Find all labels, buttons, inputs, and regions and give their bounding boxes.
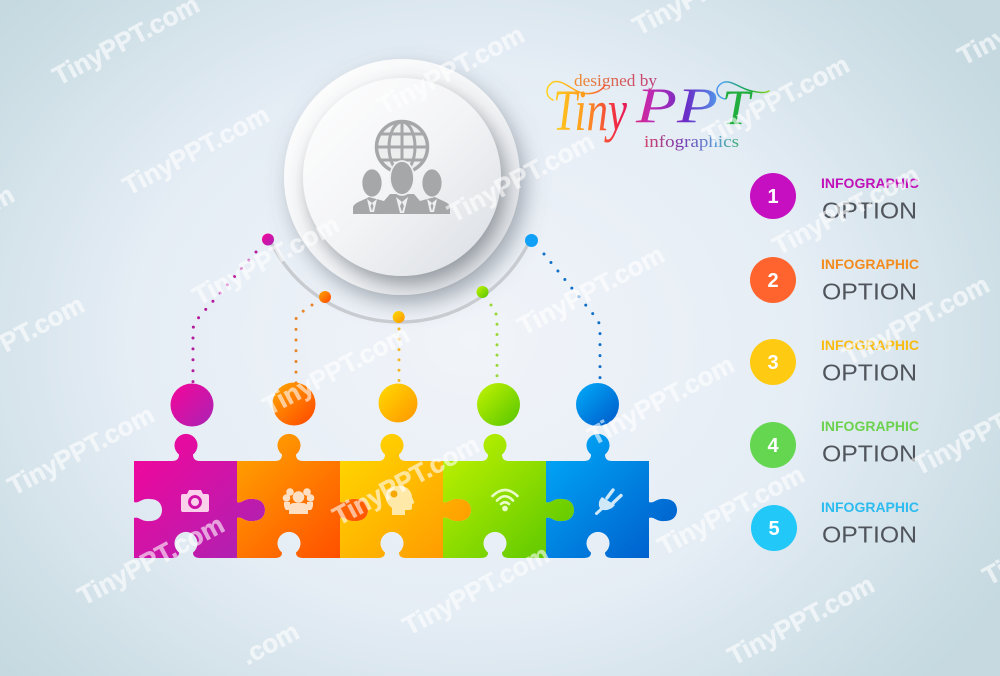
logo: designed by TinyPPT infographics: PP — [635, 77, 718, 133]
watermarks: TinyPPT.com — [652, 459, 809, 561]
watermarks: TinyPPT.com — [697, 49, 854, 151]
icon: camera — [181, 490, 209, 512]
watermarks: TinyPPT.com — [837, 269, 994, 371]
puzzle piece 3 — [340, 434, 471, 558]
legend item 3: 3 — [767, 352, 779, 374]
legend item 4: INFOGRAPHIC — [821, 418, 919, 434]
watermarks: TinyPPT.com — [372, 19, 529, 121]
legend item 4: 4 — [767, 435, 779, 457]
icon: group of people — [283, 488, 314, 514]
legend item 2: OPTION — [822, 278, 917, 304]
dotted connectors — [193, 252, 600, 383]
legend item 2: INFOGRAPHIC — [821, 256, 919, 272]
legend item 3 — [750, 337, 919, 386]
logo: designed by TinyPPT infographics: infographics — [644, 132, 739, 151]
puzzle piece 5 — [546, 434, 677, 558]
icon: power plug — [596, 490, 621, 514]
legend item 4 — [750, 418, 919, 468]
watermarks: TinyPPT.com — [2, 399, 159, 501]
legend item 1: 1 — [767, 186, 779, 208]
icon: globe and business people — [353, 121, 450, 214]
icon: wifi signal — [492, 490, 518, 511]
watermarks: TinyPPT.com — [767, 159, 924, 261]
watermarks: .com — [236, 616, 304, 671]
legend item 1: INFOGRAPHIC — [821, 175, 919, 191]
watermarks: TinyPPT.com — [397, 539, 554, 641]
logo: designed by TinyPPT infographics: Tiny — [553, 78, 627, 143]
puzzle piece 1 — [134, 434, 265, 558]
watermarks: TinyPPT.com — [117, 99, 274, 201]
legend item 2: 2 — [767, 270, 779, 292]
puzzle piece 2 — [237, 434, 368, 558]
central hub disc — [284, 59, 520, 295]
arc node dots — [262, 234, 538, 323]
legend item 2 — [750, 256, 919, 304]
legend item 5: 5 — [768, 518, 780, 540]
watermarks: TinyPPT.com — [187, 209, 344, 311]
legend item 5: INFOGRAPHIC — [821, 499, 919, 515]
watermarks: TinyPPT.com — [72, 509, 229, 611]
watermarks: TinyPPT.com — [257, 319, 414, 421]
watermarks: TinyPPT.com — [512, 239, 669, 341]
legend item 5 — [751, 499, 919, 551]
puzzle chain — [134, 434, 677, 558]
connector arc — [272, 244, 528, 322]
legend item 1 — [750, 173, 919, 224]
logo: designed by TinyPPT infographics: designed by — [574, 71, 658, 90]
watermarks: TinyPPT.com — [442, 126, 599, 228]
watermarks: TinyPPT.com — [582, 349, 739, 451]
coloured circles above puzzle — [170, 382, 619, 426]
legend item 4: OPTION — [822, 440, 917, 466]
icon: head with gear — [386, 486, 414, 515]
watermarks: TinyPPT.com — [327, 429, 484, 531]
logo: designed by TinyPPT infographics — [547, 71, 769, 151]
legend item 3: INFOGRAPHIC — [821, 337, 919, 353]
legend item 3: OPTION — [822, 360, 917, 386]
puzzle piece 4 — [443, 434, 574, 558]
logo: designed by TinyPPT infographics: T — [722, 79, 753, 135]
legend item 5: OPTION — [822, 522, 917, 548]
watermarks: TinyPPT.com — [722, 569, 879, 671]
legend item 1: OPTION — [822, 198, 917, 224]
